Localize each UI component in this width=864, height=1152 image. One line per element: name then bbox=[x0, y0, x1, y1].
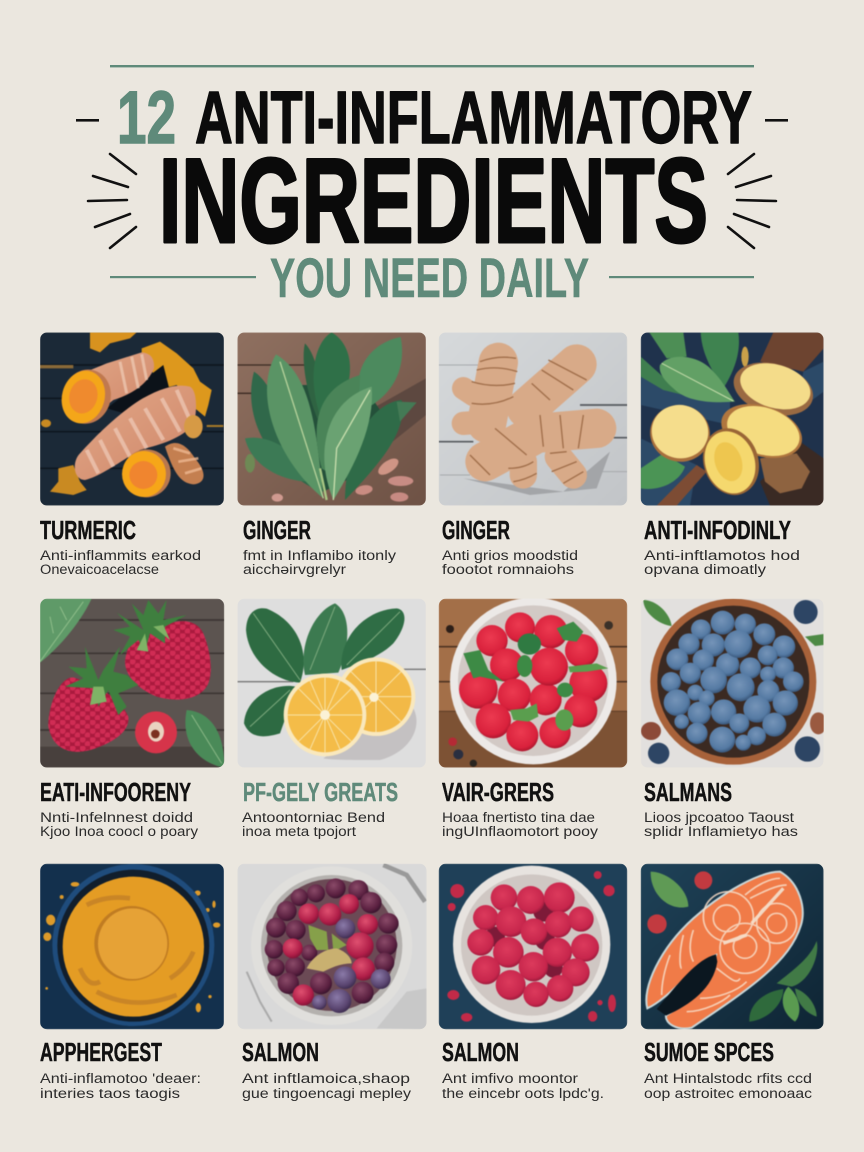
image: turmeric powder bowl bbox=[40, 864, 224, 1029]
description: Onevaicoacelacse bbox=[40, 562, 159, 577]
title number: 12 bbox=[117, 76, 176, 159]
description bbox=[242, 810, 385, 839]
description bbox=[644, 548, 800, 577]
subtitle: YOU NEED DAILY bbox=[270, 246, 589, 309]
description: splidr Inflamietyo has bbox=[644, 824, 798, 839]
icon: right rays bbox=[728, 154, 776, 248]
image: orange slices and leaves bbox=[237, 599, 426, 768]
description: interies taos taogis bbox=[40, 1086, 180, 1101]
description: Kjoo Inoa coocl o poary bbox=[40, 824, 198, 839]
heading: TURMERIC bbox=[40, 515, 136, 545]
panel: ginger slices bbox=[641, 332, 824, 577]
description: Hoaa fnertisto tina dae bbox=[442, 810, 595, 825]
description: opvana dimoatly bbox=[644, 562, 766, 577]
heading: SUMOE SPCES bbox=[644, 1037, 774, 1067]
image: turmeric bbox=[40, 332, 224, 506]
description: gue tingoencagi mepley bbox=[242, 1086, 411, 1101]
image: green leaves bbox=[237, 332, 426, 506]
panel: raspberries navy bbox=[439, 864, 627, 1101]
image: salmon steak bbox=[641, 864, 824, 1029]
description bbox=[644, 1071, 812, 1101]
description bbox=[40, 810, 198, 839]
subtitle rule left bbox=[110, 276, 256, 278]
description bbox=[242, 1071, 411, 1101]
panel: strawberries bbox=[439, 598, 627, 839]
heading: SALMON bbox=[242, 1037, 319, 1067]
left dash bbox=[76, 119, 99, 122]
description: Ant Hintalstodc rfits ccd bbox=[644, 1071, 812, 1086]
description bbox=[442, 810, 598, 839]
description: oop astroitec emonoaac bbox=[644, 1086, 812, 1101]
description: foootot romnaiohs bbox=[442, 562, 574, 577]
image: raspberries on wood bbox=[40, 599, 224, 768]
description bbox=[442, 1071, 604, 1101]
description bbox=[40, 1071, 201, 1101]
description: Nnti-Infelnnest doidd bbox=[40, 810, 193, 825]
description bbox=[442, 548, 578, 577]
image: ginger slices bbox=[641, 332, 824, 506]
description: Lioos jpcoatoo Taoust bbox=[644, 810, 794, 825]
description bbox=[40, 548, 201, 577]
description: Ant inftlamoica,shaop bbox=[242, 1071, 410, 1086]
image: strawberry bowl bbox=[439, 598, 627, 768]
top rule bbox=[110, 65, 754, 67]
heading: ANTI-INFODINLY bbox=[644, 515, 791, 545]
panel: turmeric powder bbox=[40, 864, 224, 1101]
heading: APPHERGEST bbox=[40, 1037, 162, 1067]
image: blueberry bowl bbox=[641, 599, 827, 768]
panel: salmon bbox=[641, 864, 824, 1101]
panel: blueberries bbox=[641, 599, 827, 839]
description: aicchəirvgrelyr bbox=[243, 562, 347, 577]
heading: GINGER bbox=[442, 515, 510, 545]
heading: EATI-INFOORENY bbox=[40, 777, 191, 807]
header bbox=[76, 65, 788, 309]
heading: VAIR-GRERS bbox=[442, 777, 554, 807]
panel: citrus bbox=[237, 599, 426, 839]
subtitle rule right bbox=[609, 276, 754, 278]
heading: GINGER bbox=[243, 515, 311, 545]
description: Anti-inflammits earkod bbox=[40, 548, 201, 563]
panel: ginger root bbox=[439, 332, 627, 577]
description bbox=[644, 810, 798, 839]
panel: dark berries bbox=[237, 864, 427, 1101]
heading: SALMON bbox=[442, 1037, 519, 1067]
description: Anti-inflamotoo 'deaer: bbox=[40, 1071, 201, 1086]
description: Ant imfivo moontor bbox=[442, 1071, 579, 1086]
image: raspberry bowl on navy bbox=[439, 864, 627, 1029]
heading: SALMANS bbox=[644, 777, 732, 807]
panel: leaves bbox=[237, 332, 426, 577]
description: ingUInflaomotort pooy bbox=[442, 824, 598, 839]
panel: raspberries bbox=[40, 599, 224, 839]
description: the eincebr oots lpdc'g. bbox=[442, 1086, 604, 1101]
icon: left rays bbox=[88, 154, 136, 248]
panel: turmeric bbox=[40, 332, 224, 577]
image: ginger root bbox=[439, 332, 627, 506]
description bbox=[243, 548, 396, 577]
description: Anti-inftlamotos hod bbox=[644, 548, 800, 563]
image: dark berry bowl bbox=[237, 864, 427, 1029]
description: Anti grios moodstid bbox=[442, 548, 578, 563]
right dash bbox=[765, 119, 788, 122]
description: Antoontorniac Bend bbox=[242, 810, 385, 825]
heading: PF-GELY GREATS bbox=[243, 777, 398, 807]
description: fmt in Inflamibo itonly bbox=[243, 548, 396, 563]
description: inoa meta tpojort bbox=[242, 824, 356, 839]
